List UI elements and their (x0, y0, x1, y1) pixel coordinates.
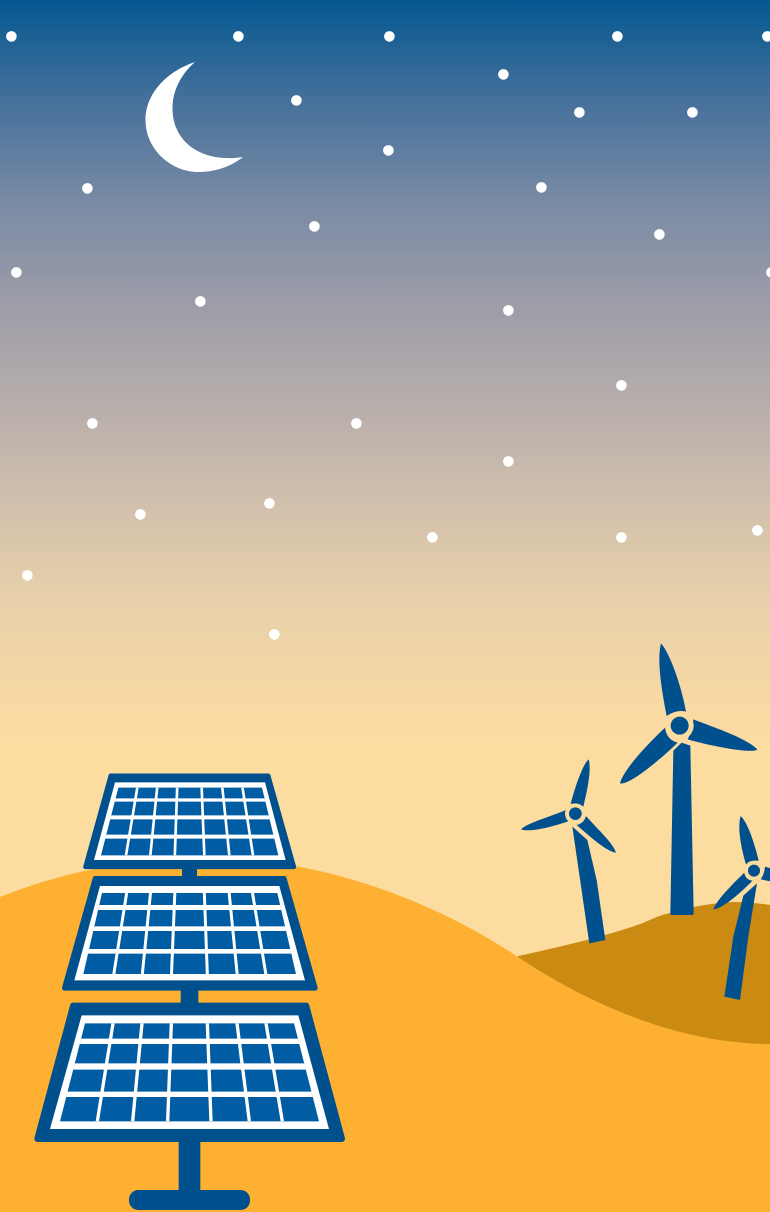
background: pale horizon band (0, 775, 770, 1075)
wind turbines (521, 643, 770, 1000)
stars (6, 31, 770, 640)
icon: crescent moon (146, 62, 243, 172)
icon: left wind turbine (521, 759, 616, 943)
solar panel: bottom (38, 1006, 342, 1139)
hill: main orange foreground dune (0, 857, 770, 1212)
solar panel array (38, 776, 342, 1210)
icon: right wind turbine (713, 816, 770, 1000)
hill: far dark hill (518, 902, 770, 1060)
connector posts and base (129, 867, 250, 1210)
solar panel: middle (65, 879, 315, 988)
icon: large wind turbine (620, 643, 757, 915)
solar panel: top (85, 776, 294, 867)
background: night-to-dawn sky (0, 0, 770, 775)
